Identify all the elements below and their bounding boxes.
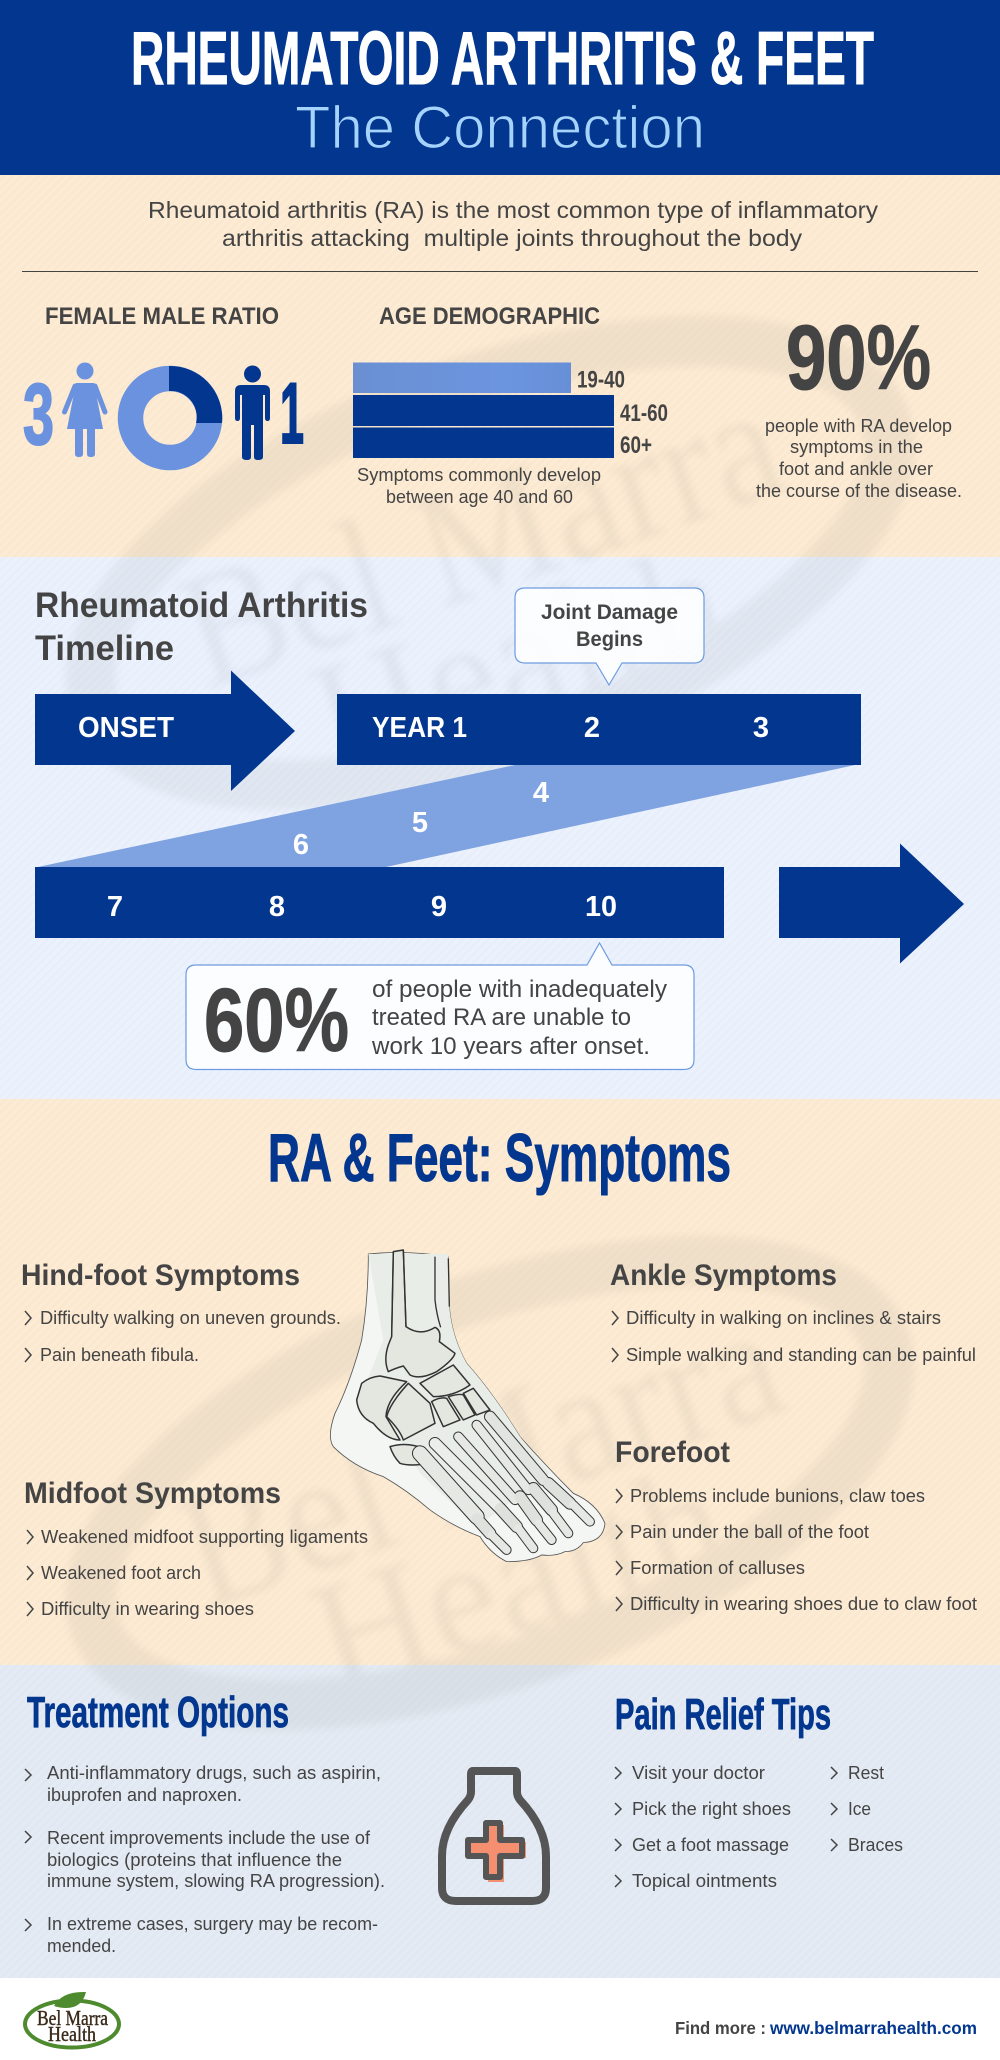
bullet list: Pain beneath fibula. [40,1344,199,1365]
bullet list: Weakened midfoot supporting ligaments [41,1526,368,1547]
number 1: 1 [280,366,304,462]
panel: forefoot [615,1436,977,1614]
heading: timeline [35,586,368,668]
treatment list: immune system, slowing RA progression). [47,1870,385,1891]
tips list: Pick the right shoes [632,1798,791,1819]
footer link: Find more : [675,2018,766,2038]
watermark: upper Bel Marra Health [34,250,946,876]
heading: treatment options: Treatment Options [27,1688,289,1737]
treatment list: mended. [47,1935,116,1956]
bar: 60+: 60+ [620,432,652,459]
bullet list [612,1307,976,1365]
treatment list [25,1762,385,1956]
stat description: people with RA develop [765,416,952,436]
callout: joint damage begins: Joint Damage [541,601,678,624]
bar: years 1 to 3: YEAR 1 [372,712,467,744]
icon: medicine bottle [442,1771,546,1901]
bar: 19-40: 19-40 [577,366,625,394]
heading: timeline: Rheumatoid Arthritis [35,586,368,625]
tips list: Visit your doctor [632,1762,765,1783]
stat description: symptoms in the [790,437,923,457]
watermark: lower Bel Marra Health [34,1170,946,1796]
heading: pain relief tips: Pain Relief Tips [615,1690,831,1739]
treatment list: biologics (proteins that influence the [47,1849,342,1870]
panel: female male ratio [23,303,304,463]
treatment list: ibuprofen and naproxen. [47,1784,242,1805]
tips list [615,1762,903,1891]
bullet list [25,1307,341,1365]
footer logo: Health [48,2022,96,2046]
heading: age demographic: AGE DEMOGRAPHIC [379,303,600,330]
bullet list: Pain under the ball of the foot [630,1521,869,1542]
background: intro section [0,175,1000,557]
intro text: arthritis attacking multiple joints throughout the body [222,225,803,251]
year labels 4 to 6: 5 [412,807,428,839]
treatment list: Recent improvements include the use of [47,1827,371,1848]
icon: male figure [235,366,270,460]
background: symptoms section [0,1099,1000,1665]
callout: 60 percent stat: of people with inadequately [372,976,667,1003]
panel: 90 percent stat [756,307,962,501]
bullet list: Problems include bunions, claw toes [630,1485,925,1506]
callout: joint damage begins: Begins [576,628,643,651]
bar: years 7 to 10: 10 [585,891,617,923]
bar: years 1 to 3 [337,694,861,765]
background: treatment section [0,1665,1000,1978]
caption: symptoms age [357,465,601,507]
heading: female male ratio: FEMALE MALE RATIO [45,303,279,330]
year labels 4 to 6: 6 [293,829,309,861]
caption: symptoms age: between age 40 and 60 [386,487,573,507]
callout: 60 percent stat [186,943,694,1071]
panel: ankle symptoms [610,1259,976,1365]
bar: years 7 to 10 [35,867,724,938]
bullet list: Difficulty walking on uneven grounds. [40,1307,341,1328]
watermark: upper Bel Marra Health: Health [291,509,745,808]
bar: years 7 to 10: 8 [269,891,285,923]
bar: years 1 to 3: 3 [753,712,769,744]
callout: 60 percent stat: 60% [204,971,349,1071]
stat description: foot and ankle over [779,459,933,479]
watermark: upper Bel Marra Health: Bel Marra [157,349,803,724]
bar: years 7 to 10: 7 [107,891,123,923]
panel: ankle symptoms: Ankle Symptoms [610,1259,837,1292]
year labels 4 to 6: 4 [533,777,549,809]
bullet list: Difficulty in wearing shoes due to claw foot [630,1593,977,1614]
tips list: Braces [848,1834,903,1855]
bullet list: Difficulty in wearing shoes [41,1598,254,1619]
intro text [148,197,879,251]
panel: timeline [35,586,964,1071]
big number: 90%: 90% [786,307,931,409]
panel: midfoot symptoms: Midfoot Symptoms [24,1477,281,1510]
callout: 60 percent stat: work 10 years after onset. [371,1033,650,1060]
arrow: onset [35,670,295,791]
callout: 60 percent stat: treated RA are unable to [372,1004,631,1031]
panel: midfoot symptoms [24,1477,368,1619]
bar: 41-60 [353,395,668,427]
year labels 4 to 6 [293,777,549,861]
bullet list: Weakened foot arch [41,1562,201,1583]
subtitle: The Connection [295,94,705,161]
chart: ratio donut [130,366,222,458]
intro text: Rheumatoid arthritis (RA) is the most common type of inflammatory [148,197,879,223]
bullet list: Formation of calluses [630,1557,805,1578]
tips list: Topical ointments [632,1870,777,1891]
bar: 19-40 [353,362,625,394]
number 3: 3 [23,367,54,463]
watermark: lower Bel Marra Health: Bel Marra [157,1269,803,1644]
heading: timeline: Timeline [35,629,174,668]
footer logo: Bel Marra [37,2006,109,2030]
tips list: Get a foot massage [632,1834,789,1855]
panel: age demographic [353,303,668,507]
treatment list: Anti-inflammatory drugs, such as aspirin, [47,1762,381,1783]
panel: treatment options [25,1688,385,1956]
bullet list [616,1485,977,1614]
stat description: the course of the disease. [756,481,962,501]
panel: pain relief tips [615,1690,903,1891]
footer logo [25,1992,119,2048]
arrow: continuing [779,844,964,964]
connector band: years 4 to 6 [38,765,855,867]
callout: joint damage begins [515,588,704,685]
bullet list [27,1526,368,1619]
footer link [675,2018,977,2038]
panel: hind-foot symptoms [21,1259,341,1365]
bullet list: Simple walking and standing can be painful [626,1344,976,1365]
caption: symptoms age: Symptoms commonly develop [357,465,601,485]
tips list: Rest [848,1762,884,1783]
footer link: www.belmarrahealth.com [769,2018,977,2038]
watermark: lower Bel Marra Health: Health [291,1429,745,1728]
bullet list: Difficulty in walking on inclines & stairs [626,1307,941,1328]
tips list: Ice [848,1798,871,1819]
treatment list: In extreme cases, surgery may be recom- [47,1913,378,1934]
arrow: onset: ONSET [78,712,174,744]
header banner [0,0,1000,175]
stat description [756,416,962,501]
bar: years 1 to 3: 2 [584,712,600,744]
background: timeline section [0,557,1000,1099]
bar: 41-60: 41-60 [620,400,668,427]
illustration: foot skeleton [330,1250,605,1562]
bar: years 7 to 10: 9 [431,891,447,923]
heading: symptoms: RA & Feet: Symptoms [268,1120,731,1196]
panel: hind-foot symptoms: Hind-foot Symptoms [21,1259,300,1292]
bar: 60+ [353,428,652,459]
panel: forefoot: Forefoot [615,1436,730,1469]
icon: female figure [64,362,105,457]
